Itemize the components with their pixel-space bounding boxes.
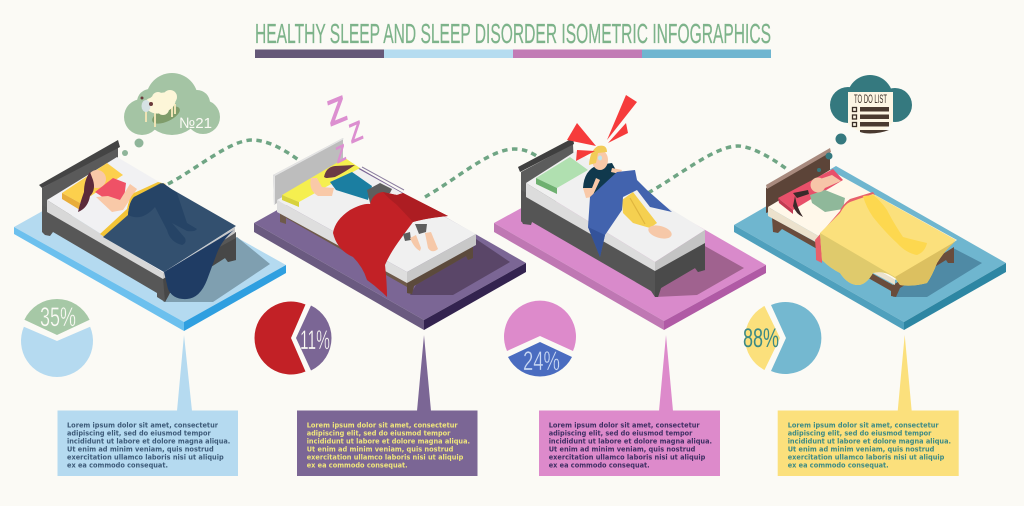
callout 4: ex ea commodo consequat. <box>788 461 889 469</box>
feet 2 <box>403 224 438 251</box>
icon: red alarm bursts <box>567 95 637 161</box>
panel: snoring on purple platform <box>254 87 526 330</box>
callout 1: exercitation ullamco laboris nisi ut aliquip <box>67 453 224 461</box>
callout 4: Ut enim ad minim veniam, quis nostrud <box>788 445 934 453</box>
callout 2: Lorem ipsum dolor sit amet, consectetur <box>307 421 458 429</box>
list rows <box>852 107 889 134</box>
icon: sheep <box>140 89 182 127</box>
platform 1 <box>14 170 286 331</box>
thought bubble: counting sheep <box>122 73 220 156</box>
callout 3: Ut enim ad minim veniam, quis nostrud <box>549 445 695 453</box>
callout 1: adipiscing elit, sed do eiusmod tempor <box>67 429 211 437</box>
bed 3 <box>518 138 705 297</box>
panel: worrying about tasks on teal platform <box>734 75 1006 330</box>
icon: snoring Z letters <box>324 87 365 170</box>
blue blanket <box>588 170 672 257</box>
pie chart: 11% <box>255 302 332 374</box>
sleeping person 2 <box>310 165 404 203</box>
callout 2: incididunt ut labore et dolore magna aliqua. <box>307 437 470 445</box>
pie chart: 24%: 24% <box>523 346 560 376</box>
lying woman <box>793 175 845 217</box>
callout 3: incididunt ut labore et dolore magna aliqua. <box>549 437 712 445</box>
callout 1 <box>58 335 238 476</box>
callout 1: incididunt ut labore et dolore magna aliqua. <box>67 437 230 445</box>
pie chart: 35% <box>21 299 93 377</box>
callout 4: Lorem ipsum dolor sit amet, consectetur <box>788 421 939 429</box>
sheep count: №21 <box>179 115 212 132</box>
callout 2: exercitation ullamco laboris nisi ut aliquip <box>307 453 463 461</box>
bed 4 <box>766 148 957 297</box>
icon: snoring Z letters: Z <box>324 87 350 135</box>
bed 2 <box>273 138 476 294</box>
bed 1 <box>39 140 236 302</box>
callout 4: exercitation ullamco laboris nisi ut aliquip <box>788 453 944 461</box>
yellow blanket <box>815 192 956 286</box>
to do list heading: TO DO LIST <box>854 92 887 106</box>
callout 2: Ut enim ad minim veniam, quis nostrud <box>307 445 453 453</box>
callout 2: adipiscing elit, sed do eiusmod tempor <box>307 429 451 437</box>
callout 3: adipiscing elit, sed do eiusmod tempor <box>549 429 693 437</box>
callout 3: Lorem ipsum dolor sit amet, consectetur <box>549 421 700 429</box>
callout 3 <box>539 335 720 476</box>
callout 3: ex ea commodo consequat. <box>549 461 650 469</box>
startled woman <box>583 146 673 241</box>
pie chart: 24% <box>504 301 576 377</box>
callout 3: exercitation ullamco laboris nisi ut aliquip <box>549 453 705 461</box>
platform 2 <box>254 166 526 330</box>
panel: healthy sleep bed on blue platform <box>14 73 286 331</box>
callout 2 <box>297 335 478 476</box>
title colour bar <box>255 50 771 58</box>
icon: snoring Z letters: Z <box>346 115 365 150</box>
callout 2: ex ea commodo consequat. <box>307 461 408 469</box>
callout 4 <box>778 335 959 476</box>
panel: startled awake on pink platform <box>494 95 766 330</box>
callout 1: Ut enim ad minim veniam, quis nostrud <box>67 445 214 453</box>
platform 4 <box>734 166 1006 330</box>
pie chart: 35%: 35% <box>40 302 76 332</box>
pie chart: 11%: 11% <box>300 325 330 355</box>
dashed connector lines <box>168 140 788 197</box>
pie chart: 88% <box>743 302 821 374</box>
thought bubble: to do list <box>817 75 912 172</box>
sleeping woman 1 <box>78 170 137 212</box>
pie chart: 88%: 88% <box>743 323 779 353</box>
platform 3 <box>494 167 766 330</box>
callout 4: adipiscing elit, sed do eiusmod tempor <box>788 429 932 437</box>
red blanket <box>333 192 448 297</box>
icon: snoring Z letters: Z <box>334 139 348 170</box>
blanket 1 <box>100 182 236 299</box>
callout 4: incididunt ut labore et dolore magna aliqua. <box>788 437 951 445</box>
callout 1: Lorem ipsum dolor sit amet, consectetur <box>67 421 219 429</box>
callout 1: ex ea commodo consequat. <box>67 461 168 469</box>
